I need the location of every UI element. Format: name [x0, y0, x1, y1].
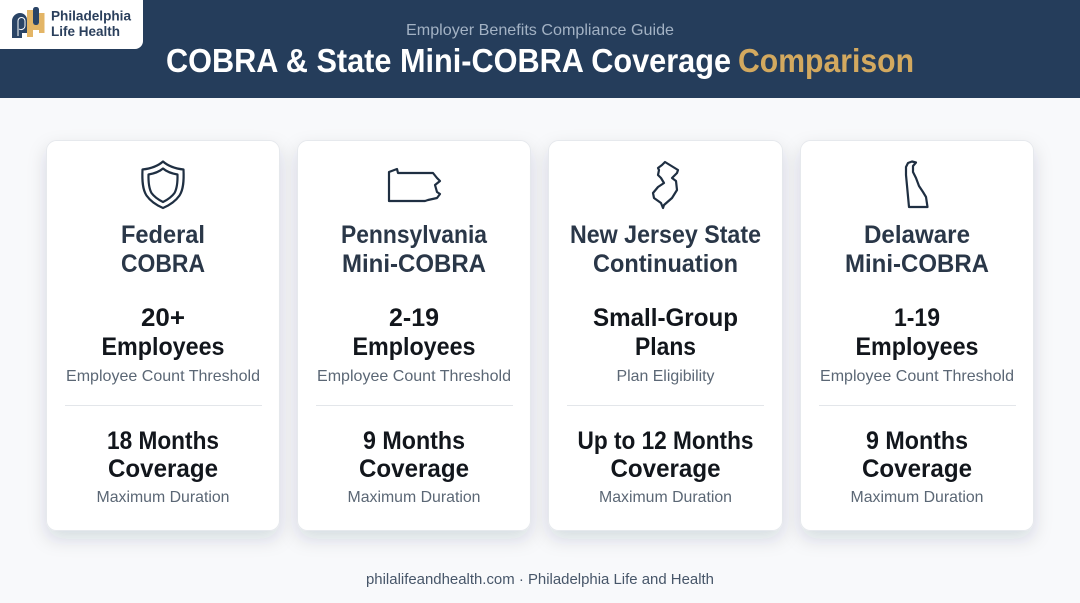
duration metric: Coverage [862, 455, 972, 483]
threshold metric: 2-19 [389, 304, 439, 332]
panel: federal COBRA [46, 140, 280, 530]
threshold metric: Employees [352, 333, 476, 361]
heading: Mini-COBRA [845, 250, 989, 278]
heading: Delaware [864, 221, 970, 249]
header band [0, 0, 1080, 98]
icon: Pennsylvania outline [389, 169, 440, 201]
logo wordmark: Philadelphia [51, 8, 131, 24]
heading: Federal [121, 221, 205, 249]
eligibility label: Plan Eligibility [616, 368, 714, 385]
threshold metric: 1-19 [894, 304, 940, 332]
duration label: Maximum Duration [96, 489, 230, 506]
threshold metric: 20+ [141, 304, 185, 332]
heading: New Jersey State [570, 221, 761, 249]
duration metric: 9 Months [363, 427, 465, 455]
logo wordmark: Life Health [51, 23, 120, 39]
threshold label: Employee Count Threshold [820, 368, 1014, 385]
duration metric [359, 427, 469, 483]
title: Comparison [738, 42, 914, 79]
eligibility metric [593, 304, 738, 361]
duration metric [107, 427, 219, 483]
logo block [0, 0, 143, 49]
heading: Continuation [593, 250, 738, 278]
duration metric: 9 Months [866, 427, 968, 455]
duration label: Maximum Duration [599, 489, 732, 506]
duration metric: Coverage [108, 455, 218, 483]
heading: COBRA [121, 250, 205, 278]
heading [570, 221, 761, 278]
duration metric [578, 427, 754, 483]
heading [341, 221, 488, 278]
subtitle: Employer Benefits Compliance Guide [406, 22, 674, 39]
duration metric: Up to 12 Months [578, 427, 754, 455]
heading [845, 221, 989, 278]
duration metric: Coverage [359, 455, 469, 483]
duration label: Maximum Duration [348, 489, 480, 506]
title: COBRA & State Mini-COBRA Coverage [166, 42, 731, 79]
logo wordmark [51, 8, 131, 39]
threshold metric: Employees [856, 333, 978, 361]
threshold metric [352, 304, 476, 361]
eligibility metric: Small-Group [593, 304, 738, 332]
threshold metric [102, 304, 224, 361]
footer: philalifeandhealth.com · Philadelphia Life and Health [366, 571, 714, 588]
duration metric: Coverage [610, 455, 721, 483]
duration metric [862, 427, 972, 483]
threshold metric: Employees [102, 333, 224, 361]
heading: Mini-COBRA [342, 250, 486, 278]
duration label: Maximum Duration [850, 489, 984, 506]
panel: Pennsylvania mini-COBRA [298, 140, 530, 530]
eligibility metric: Plans [635, 333, 696, 361]
threshold label: Employee Count Threshold [317, 368, 511, 385]
threshold metric [856, 304, 978, 361]
icon: logo mark [12, 7, 44, 38]
panel: Delaware mini-COBRA [800, 140, 1034, 530]
threshold label: Employee Count Threshold [66, 368, 260, 385]
heading [121, 221, 205, 278]
heading: Pennsylvania [341, 221, 488, 249]
icon: New Jersey outline [653, 162, 678, 208]
icon: shield [142, 162, 184, 208]
panel: New Jersey state continuation [548, 140, 782, 530]
icon: Delaware outline [906, 162, 928, 207]
duration metric: 18 Months [107, 427, 219, 455]
